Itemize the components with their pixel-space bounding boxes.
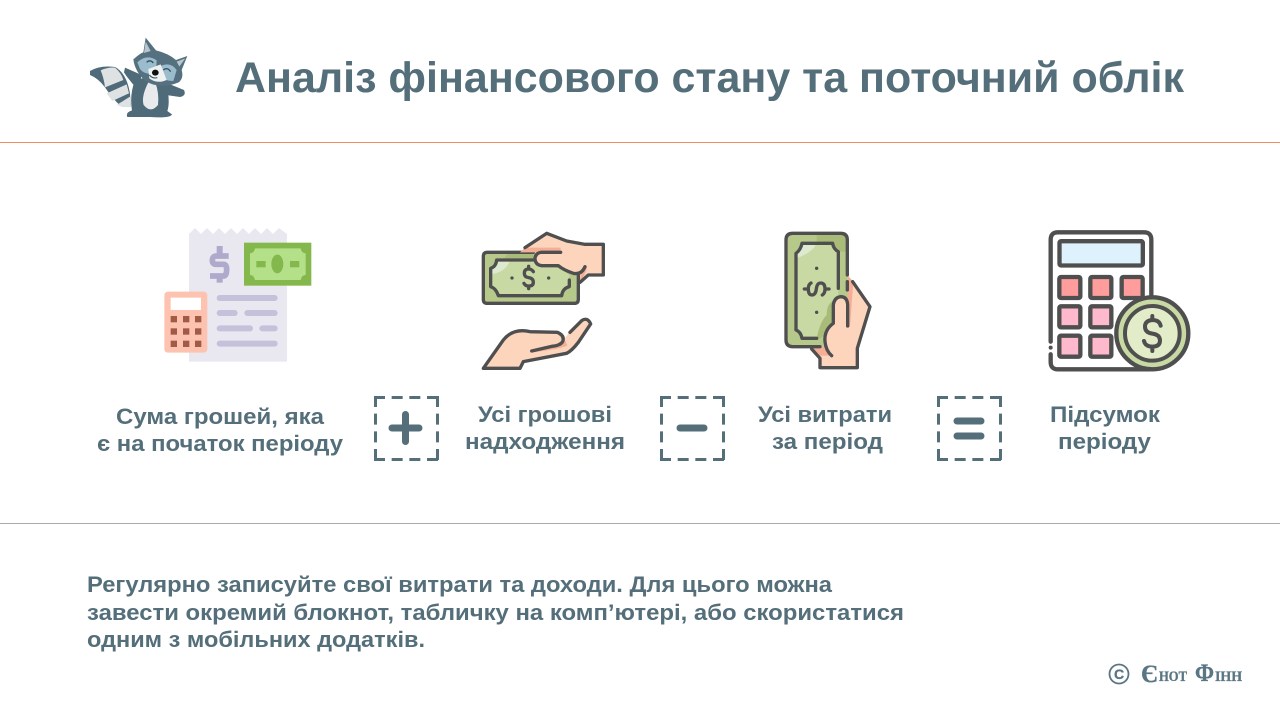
icon: hands passing money <box>483 233 603 368</box>
label: period result: періоду <box>1058 429 1152 454</box>
label: opening balance: Сума грошей, яка <box>116 404 325 429</box>
label: income <box>465 402 625 454</box>
title: Аналіз фінансового стану та поточний облік <box>235 54 1184 102</box>
copyright signature: Є <box>1141 661 1158 688</box>
label: period result <box>1050 402 1161 454</box>
icon: minus in dashed box <box>660 396 724 460</box>
copyright signature <box>1110 660 1242 688</box>
label: expenses <box>758 402 892 454</box>
advice text block: одним з мобільних додатків. <box>87 627 425 652</box>
advice text block: Регулярно записуйте свої витрати та доходи. Для цього можна <box>87 572 833 597</box>
icon: hand holding banknote <box>786 233 870 368</box>
label: income: Усі грошові <box>478 402 612 427</box>
icon: plus in dashed box <box>374 396 438 460</box>
icon: raccoon mascot <box>90 38 187 117</box>
icon: equals in dashed box <box>937 396 1001 460</box>
icon: calculator with coin <box>1049 232 1188 369</box>
copyright signature: Ф <box>1195 660 1214 687</box>
advice text block <box>87 572 904 652</box>
copyright signature: ІНН <box>1215 669 1242 685</box>
copyright signature: C <box>1114 666 1124 682</box>
icon: receipt, banknote and calculator <box>164 228 311 362</box>
label: expenses: Усі витрати <box>758 402 892 427</box>
label: period result: Підсумок <box>1050 402 1161 427</box>
label: opening balance <box>97 404 344 456</box>
copyright signature: НОТ <box>1159 669 1187 685</box>
label: income: надходження <box>465 429 625 454</box>
advice text block: завести окремий блокнот, табличку на комп’ютері, або скористатися <box>87 600 904 625</box>
label: opening balance: є на початок періоду <box>97 431 344 456</box>
label: expenses: за період <box>772 429 883 454</box>
